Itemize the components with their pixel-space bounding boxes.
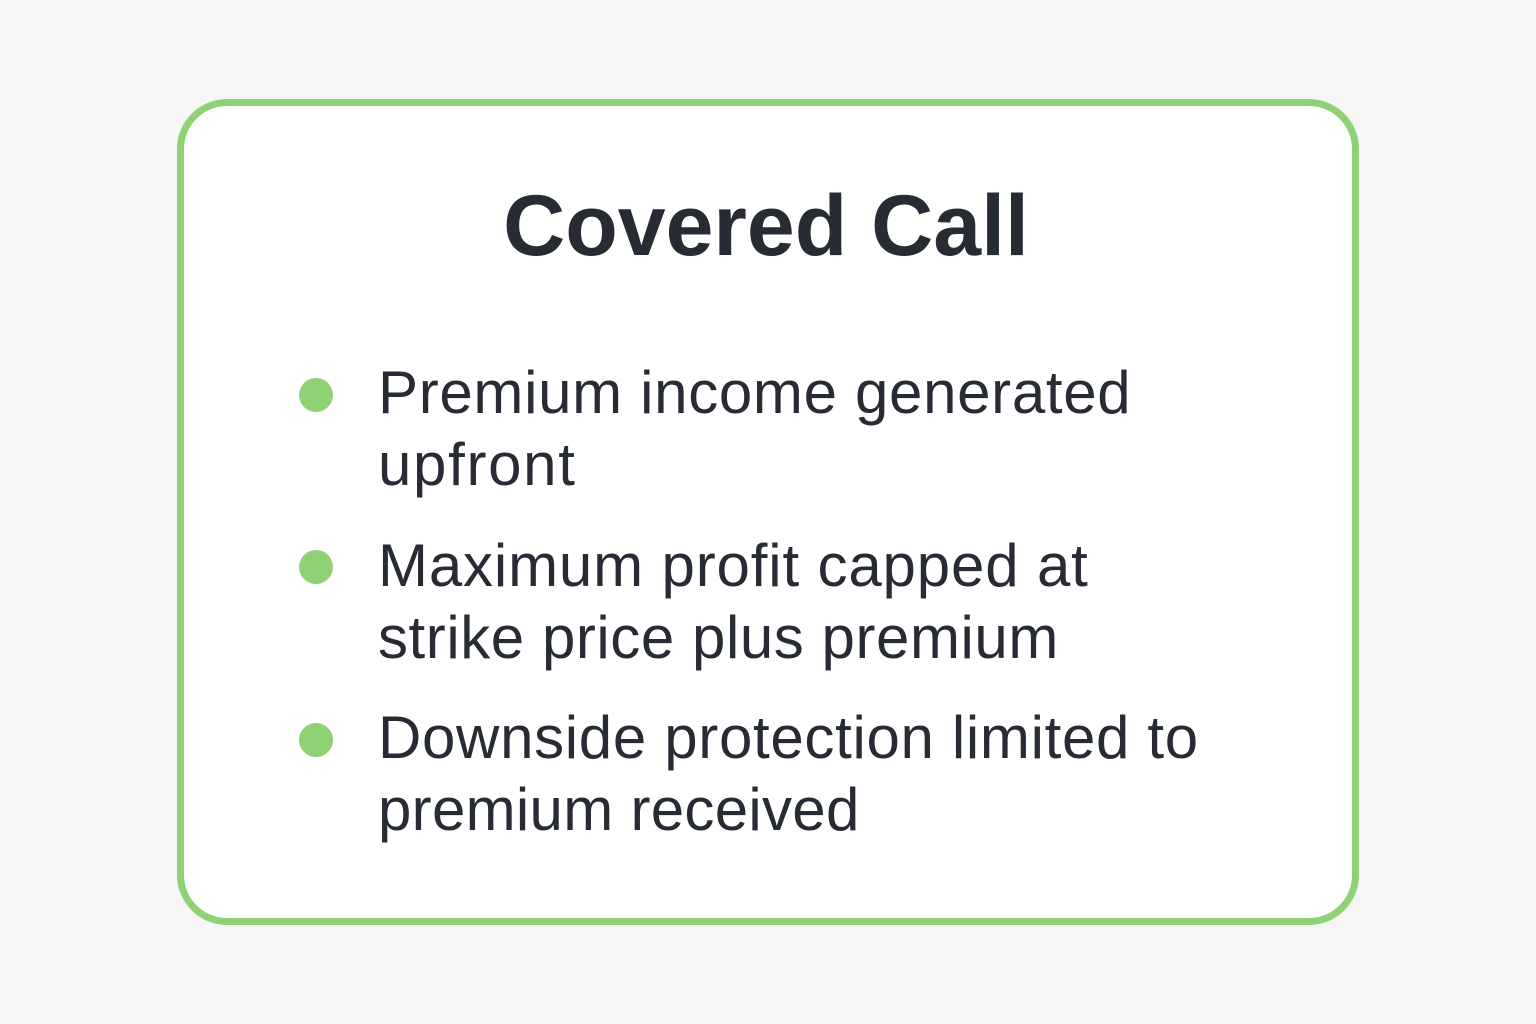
text: bullet 2: strike price plus premium <box>378 604 1059 671</box>
bullet 2 <box>299 532 1089 671</box>
text: bullet 1 <box>378 359 1131 498</box>
icon: bullet dot 3 <box>299 723 333 757</box>
text: bullet 3: premium received <box>378 776 860 843</box>
text: bullet 1: upfront <box>378 431 577 498</box>
text: bullet 2 <box>378 532 1089 671</box>
icon: bullet dot 2 <box>299 550 333 584</box>
bullet 1 <box>299 359 1131 498</box>
bullet 3 <box>299 704 1199 843</box>
icon: bullet dot 1 <box>299 378 333 412</box>
text: bullet 3 <box>378 704 1199 843</box>
title: Covered Call <box>503 178 1029 274</box>
panel: covered call card <box>177 99 1359 925</box>
text: bullet 2: Maximum profit capped at <box>378 532 1089 599</box>
text: bullet 3: Downside protection limited to <box>378 704 1199 771</box>
text: bullet 1: Premium income generated <box>378 359 1131 426</box>
